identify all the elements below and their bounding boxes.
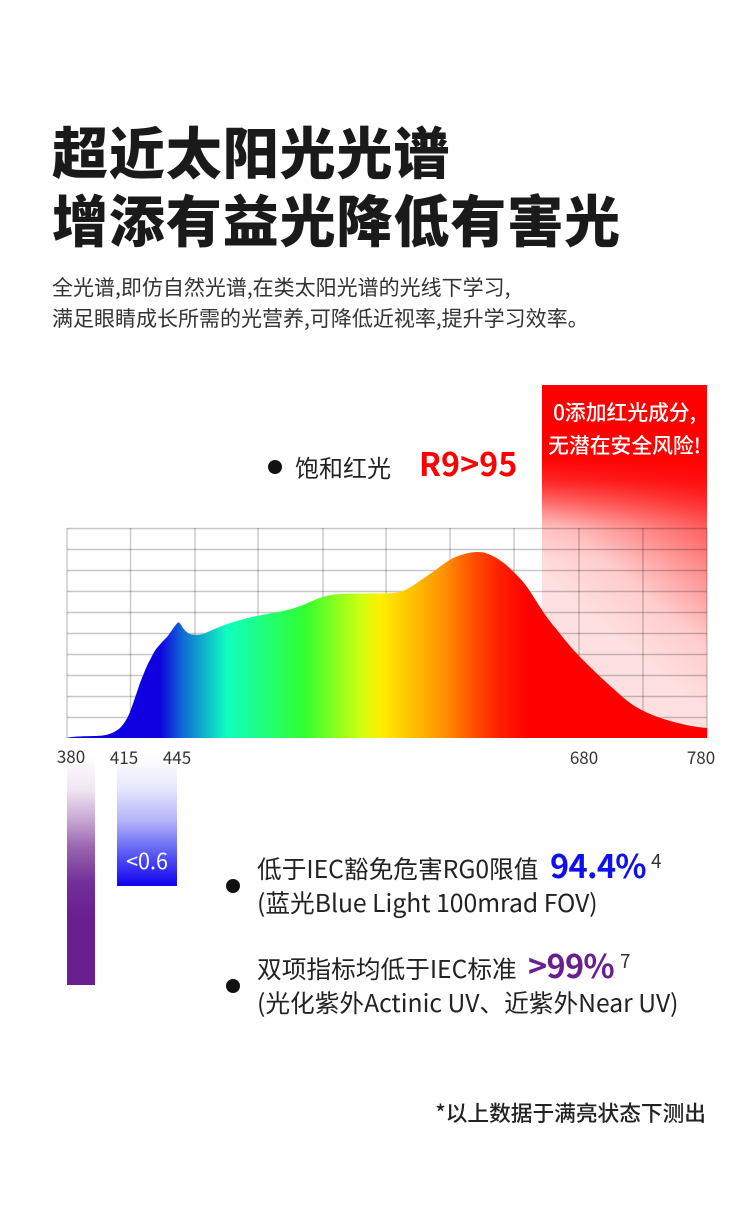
subtitle text block: 满足眼睛成长所需的光营养,可降低近视率,提升学习效率。 (52, 303, 589, 333)
blue light heading: 低于IEC豁免危害RG0限值 (257, 850, 538, 886)
blue light value: 94.4% (550, 841, 646, 888)
axis label 445: 445 (163, 744, 191, 769)
spectrum curve (67, 552, 707, 738)
red panel callout text: 0添加红光成分, (553, 396, 696, 426)
blue light note: (蓝光Blue Light 100mrad FOV) (257, 884, 598, 920)
R9 value: R9>95 (419, 440, 517, 486)
red panel callout text (548, 396, 701, 459)
bullet: blue light (226, 879, 240, 893)
UV footnote: 7 (620, 947, 631, 974)
title (52, 110, 621, 259)
bullet: UV (226, 979, 240, 993)
axis label 415: 415 (110, 744, 138, 769)
UV heading: 双项指标均低于IEC标准 (257, 950, 517, 986)
red panel callout text: 无潜在安全风险! (548, 429, 701, 459)
UV value: >99% (528, 941, 614, 988)
purple UV bar (67, 755, 95, 985)
subtitle text block: 全光谱,即仿自然光谱,在类太阳光谱的光线下学习, (52, 272, 511, 302)
axis label 680: 680 (570, 744, 598, 769)
UV text block (257, 941, 679, 1020)
title: 超近太阳光光谱 (52, 110, 450, 191)
red warning panel (542, 385, 707, 738)
footnote: *以上数据于满亮状态下测出 (435, 1097, 706, 1128)
subtitle text block (52, 272, 589, 333)
spectrum chart (66, 385, 708, 738)
saturated red label: 饱和红光 (295, 449, 391, 484)
blue bar value: <0.6 (126, 845, 168, 876)
blue light text block (257, 841, 662, 920)
blue light bar (117, 755, 177, 886)
bullet: saturated red (268, 460, 282, 474)
axis label 780: 780 (687, 744, 715, 769)
blue light footnote: 4 (651, 847, 662, 874)
axis label 380: 380 (57, 743, 85, 768)
UV note: (光化紫外Actinic UV、近紫外Near UV) (257, 984, 679, 1020)
title: 增添有益光降低有害光 (52, 178, 621, 259)
